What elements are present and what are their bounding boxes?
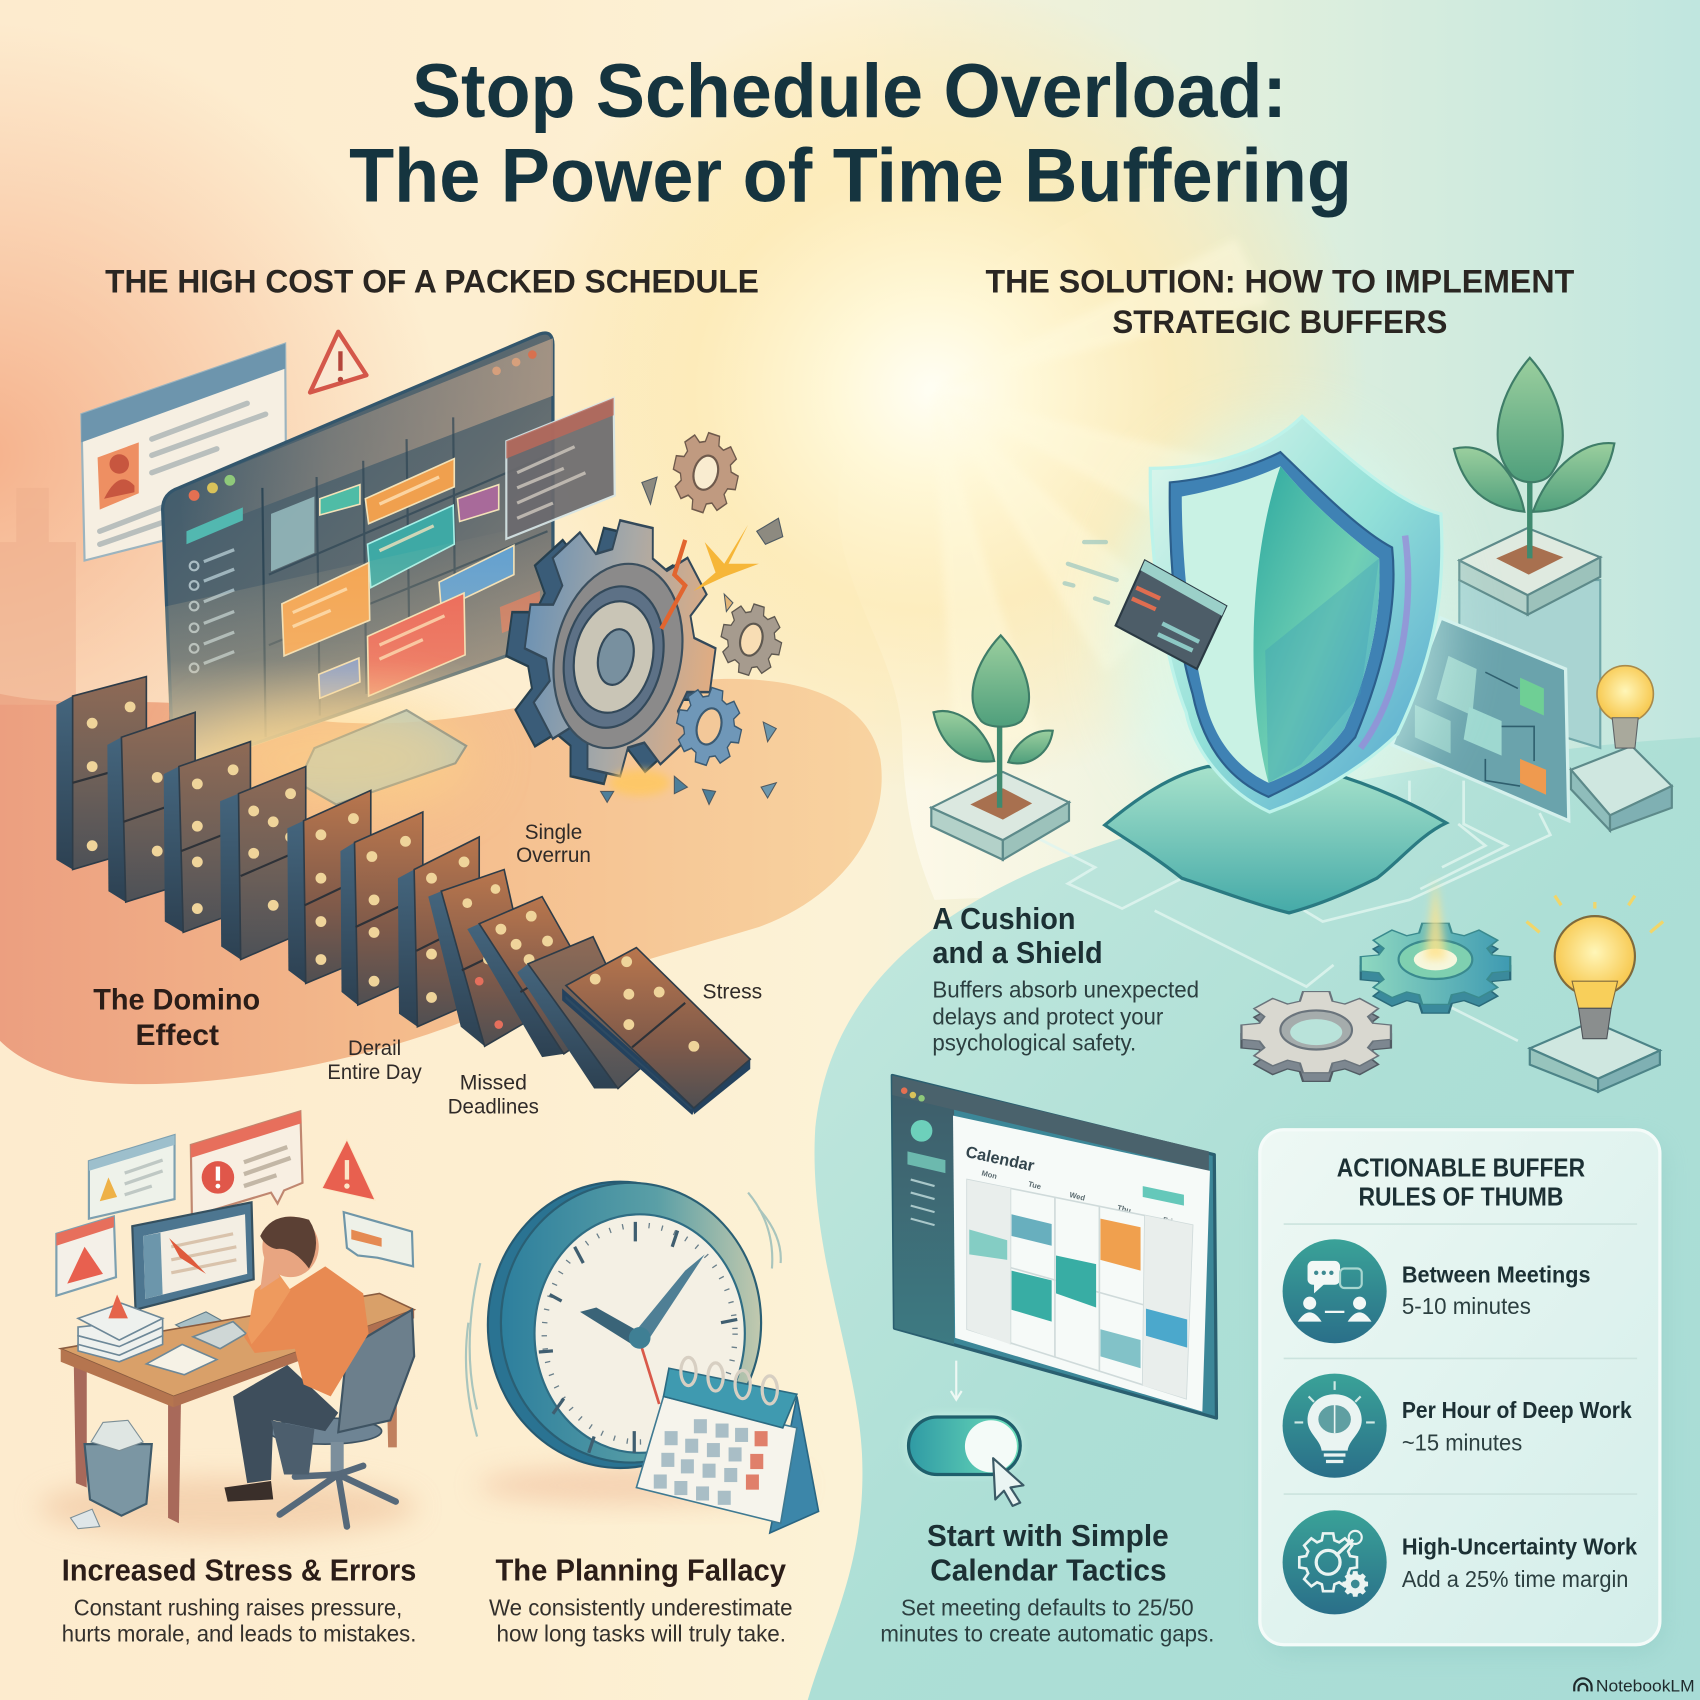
text: planning fallacy: The Planning Fallacy [495, 1555, 786, 1588]
illustration: stressed worker [38, 1111, 417, 1537]
circuit lines [1035, 781, 1550, 1041]
heading: solution: THE SOLUTION: HOW TO IMPLEMENT [986, 264, 1574, 300]
desk calendar [636, 1357, 819, 1533]
label: derail entire day: Entire Day [327, 1059, 422, 1084]
text: planning fallacy: how long tasks will truly take. [497, 1620, 786, 1646]
hill behind dominoes [0, 679, 882, 1084]
rule: deep work [1402, 1397, 1632, 1456]
shield body [1150, 416, 1442, 812]
illustration: calendar window: Calendar [964, 1143, 1037, 1175]
text: increased stress [62, 1555, 416, 1646]
domino 9 [467, 897, 613, 1057]
rule: between meetings [1402, 1262, 1590, 1319]
illustration: circuit panel [1392, 618, 1569, 821]
monitor stand [298, 710, 466, 804]
calendar events [282, 459, 540, 698]
rule: high-uncertainty: Add a 25% time margin [1402, 1566, 1628, 1592]
illustration: calendar window: Mon [981, 1168, 998, 1181]
clock hands [580, 1254, 705, 1404]
text: cushion and shield: delays and protect your [932, 1004, 1164, 1030]
rule: high-uncertainty: High-Uncertainty Work [1402, 1534, 1637, 1560]
notebooklm mark: NotebookLM [1596, 1677, 1695, 1695]
heading: solution: STRATEGIC BUFFERS [1112, 304, 1447, 340]
pillow [1105, 767, 1446, 913]
desk [61, 1293, 414, 1523]
label: the domino effect: Effect [136, 1020, 219, 1052]
sidebar [186, 488, 266, 737]
label: the domino effect: The Domino [93, 984, 260, 1016]
illustration: calendar window: Wed [1069, 1190, 1086, 1203]
illustration: breaking gear [493, 502, 759, 802]
text: calendar tactics [880, 1520, 1214, 1646]
panel heading [1337, 1152, 1585, 1212]
text: cushion and shield: A Cushion [932, 903, 1076, 936]
arrow down [951, 1361, 962, 1400]
domino 8 [428, 870, 537, 1046]
dominoes [56, 677, 750, 1115]
domino 7 [398, 837, 479, 1027]
panel: rules of thumb [1260, 1130, 1662, 1652]
text: calendar tactics: Calendar Tactics [930, 1555, 1167, 1588]
label: missed deadlines: Deadlines [448, 1093, 539, 1118]
debris [601, 477, 783, 804]
small broken gears [667, 424, 788, 773]
domino 3 [164, 742, 250, 932]
title: The Power of Time Buffering [349, 134, 1352, 219]
illustration: overloaded monitor [81, 332, 615, 804]
illustration: teal gear [1361, 878, 1510, 1013]
domino 11 [564, 948, 750, 1115]
text: increased stress: Constant rushing raises pressure, [74, 1594, 402, 1620]
glow over dominoes [195, 699, 477, 819]
calendar events [969, 1214, 1187, 1368]
label: derail entire day [327, 1035, 422, 1084]
floating profile panel [81, 344, 286, 561]
heading: high cost: THE HIGH COST OF A PACKED SCHEDULE [105, 264, 759, 300]
domino 4 [220, 767, 306, 960]
illustration: calendar window: Tue [1027, 1179, 1042, 1191]
title [349, 49, 1352, 219]
text: cushion and shield: psychological safety. [932, 1030, 1136, 1056]
toggle switch with cursor [906, 1415, 1023, 1506]
alert panels [56, 1111, 413, 1296]
illustration: calendar window [892, 1076, 1216, 1418]
icon: gear uncertainty [1283, 1510, 1387, 1614]
label: single overrun: Single [525, 819, 582, 844]
title: Stop Schedule Overload: [412, 49, 1287, 134]
label: derail entire day: Derail [348, 1035, 401, 1060]
illustration: calendar window: Fri [1162, 1215, 1173, 1226]
illustration: calendar window: Thu [1116, 1203, 1132, 1215]
text: planning fallacy [489, 1555, 793, 1646]
illustration: small bulb on pedestal [1571, 666, 1672, 830]
icon: meetings [1283, 1239, 1387, 1343]
label: single overrun [516, 819, 591, 867]
calendar grid [269, 417, 548, 716]
text: calendar tactics: Start with Simple [927, 1520, 1169, 1553]
illustration: incoming task card [1065, 542, 1226, 669]
motion arcs [466, 1193, 781, 1437]
desk monitor [132, 1202, 254, 1336]
text: cushion and shield: and a Shield [932, 937, 1103, 970]
domino 6 [340, 812, 423, 1005]
floating dark panel [506, 398, 615, 539]
icon: brain bulb [1283, 1374, 1387, 1478]
rule: between meetings: Between Meetings [1402, 1262, 1590, 1288]
domino 5 [287, 790, 371, 983]
text: calendar tactics: Set meeting defaults to 25/50 [901, 1594, 1194, 1620]
warning triangle [310, 332, 366, 392]
illustration: tower and large plant [1454, 358, 1614, 748]
screen bottom fade [163, 520, 553, 774]
domino 1 [56, 677, 146, 870]
label: the domino effect [93, 984, 260, 1052]
panel heading: ACTIONABLE BUFFER [1337, 1152, 1585, 1182]
label: missed deadlines: Missed [460, 1070, 527, 1095]
person [224, 1216, 369, 1502]
heading: solution [986, 264, 1574, 340]
text: increased stress: Increased Stress & Errors [62, 1555, 416, 1588]
text: cushion and shield [932, 903, 1199, 1056]
illustration: shield and pillow [1105, 416, 1447, 913]
illustration: large bulb [1527, 896, 1663, 1092]
clock ticks [539, 1222, 737, 1453]
spark [694, 525, 759, 591]
rule: deep work: Per Hour of Deep Work [1402, 1397, 1632, 1423]
rule: between meetings: 5-10 minutes [1402, 1293, 1531, 1319]
rule: deep work: ~15 minutes [1402, 1430, 1522, 1456]
trash can [70, 1420, 152, 1529]
label: stress: Stress [703, 979, 762, 1004]
paper stack [78, 1295, 217, 1375]
panel heading: RULES OF THUMB [1358, 1182, 1563, 1212]
label: missed deadlines [448, 1070, 539, 1118]
illustration: small plant [931, 635, 1069, 860]
illustration: gray gear [1241, 992, 1391, 1081]
illustration: clock [466, 1182, 819, 1533]
text: cushion and shield: Buffers absorb unexpected [932, 976, 1199, 1002]
domino 10 [517, 937, 651, 1089]
domino 2 [107, 712, 195, 902]
label: single overrun: Overrun [516, 842, 591, 867]
text: calendar tactics: minutes to create automatic gaps. [880, 1620, 1214, 1646]
text: increased stress: hurts morale, and leads to mistakes. [62, 1620, 416, 1646]
chair [269, 1310, 414, 1527]
city silhouette [0, 488, 76, 705]
text: planning fallacy: We consistently underestimate [489, 1594, 793, 1620]
keyboard [193, 1322, 246, 1349]
monitor screen [163, 333, 553, 772]
rule: high-uncertainty [1402, 1534, 1637, 1592]
